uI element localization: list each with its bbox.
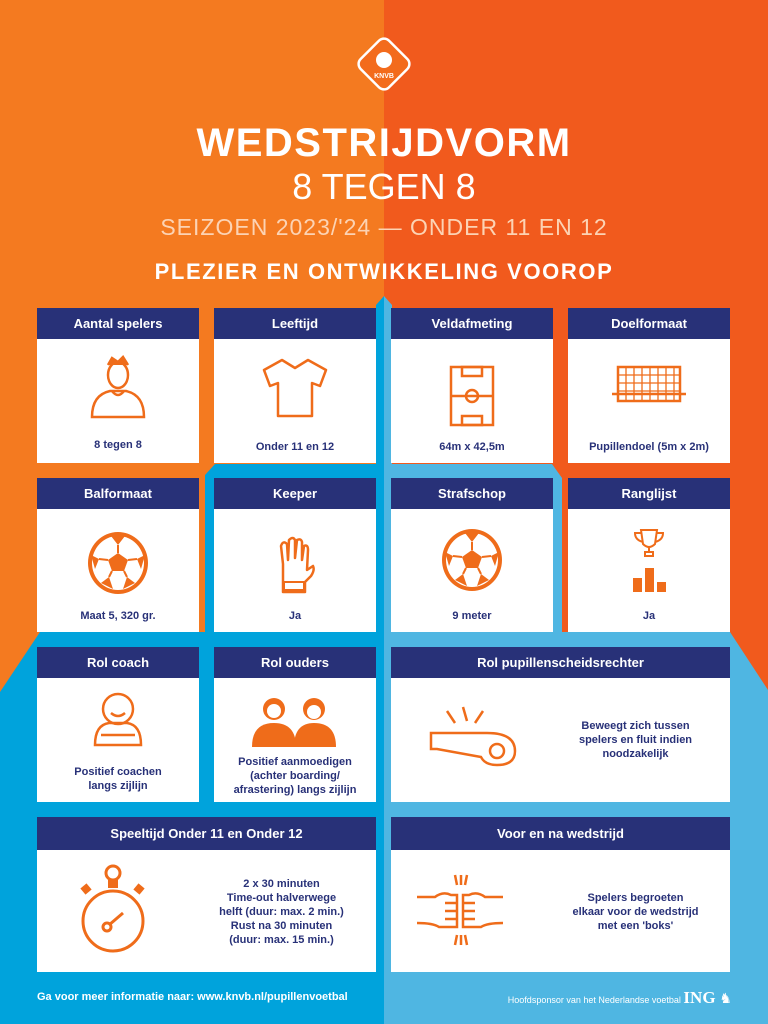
card: Strafschop <box>391 478 553 632</box>
logo <box>357 37 411 91</box>
card: Aantal spelers <box>37 308 199 463</box>
card: Leeftijd: Onder 11 en 12 <box>256 441 334 453</box>
icon: field <box>450 366 494 426</box>
card: Rol coach <box>37 647 199 802</box>
card: Speeltijd: Speeltijd Onder 11 en Onder 12 <box>110 826 303 841</box>
card: Rol pupillenscheidsrechter: Rol pupillenscheidsrechter <box>477 655 644 670</box>
card: Rol pupillenscheidsrechter <box>391 647 730 802</box>
card: Voor en na wedstrijd: met een 'boks' <box>598 920 673 932</box>
card: Rol ouders: Rol ouders <box>261 655 329 670</box>
title: SEIZOEN 2023/'24 — ONDER 11 EN 12 <box>160 214 608 240</box>
card: Leeftijd <box>214 308 376 463</box>
icon: ball <box>88 532 148 594</box>
card: Rol coach: Rol coach <box>87 655 149 670</box>
card: Rol coach: Positief coachen <box>74 766 162 778</box>
card: Leeftijd: Leeftijd <box>272 316 318 331</box>
card: Rol ouders <box>214 647 376 802</box>
icon: parents <box>252 698 336 747</box>
card: Rol pupillenscheidsrechter: spelers en fluit indien <box>579 734 692 746</box>
card: Voor en na wedstrijd: Spelers begroeten <box>588 892 683 904</box>
card: Strafschop: Strafschop <box>438 486 506 501</box>
icon: shirt <box>262 358 328 418</box>
icon: player <box>90 355 146 418</box>
card: Balformaat: Balformaat <box>84 486 152 501</box>
icon: stopwatch <box>80 864 144 952</box>
footer: website: Ga voor meer informatie naar: www.knvb.nl/pupillenvoetbal <box>37 991 348 1003</box>
subtitle: PLEZIER EN ONTWIKKELING VOOROP <box>155 259 613 284</box>
card: Voor en na wedstrijd <box>391 817 730 972</box>
card: Keeper: Ja <box>289 610 301 622</box>
card: Rol coach: langs zijlijn <box>88 780 148 792</box>
icon: ball <box>442 529 502 591</box>
card: Speeltijd: 2 x 30 minuten <box>243 878 320 890</box>
logo: KNVB <box>374 73 394 80</box>
card: Rol ouders: afrastering) langs zijlijn <box>234 784 356 796</box>
title <box>160 121 608 240</box>
footer: sponsor: Hoofdsponsor van het Nederlandse voetbal ING ♞ <box>508 988 732 1007</box>
icon: glove <box>280 536 315 594</box>
card: Strafschop: 9 meter <box>452 610 492 622</box>
card: Voor en na wedstrijd: elkaar voor de wedstrijd <box>573 906 698 918</box>
card: Veldafmeting: Veldafmeting <box>432 316 512 331</box>
card: Rol pupillenscheidsrechter: noodzakelijk <box>602 748 669 760</box>
card: Speeltijd: Time-out halverwege <box>227 892 336 904</box>
card: Keeper: Keeper <box>273 486 317 501</box>
card: Speeltijd: helft (duur: max. 2 min.) <box>219 906 344 918</box>
card: Speeltijd <box>37 817 376 972</box>
card: Doelformaat <box>568 308 730 463</box>
card: Ranglijst: Ja <box>643 610 655 622</box>
card: Keeper <box>214 478 376 632</box>
title: WEDSTRIJDVORM <box>196 121 572 165</box>
card: Balformaat <box>37 478 199 632</box>
card: Veldafmeting: 64m x 42,5m <box>439 441 505 453</box>
icon: whistle <box>430 706 516 766</box>
card: Doelformaat: Doelformaat <box>611 316 687 331</box>
card: Balformaat: Maat 5, 320 gr. <box>80 610 156 622</box>
card: Ranglijst: Ranglijst <box>622 486 676 501</box>
card: Voor en na wedstrijd: Voor en na wedstrijd <box>497 826 624 841</box>
title: 8 TEGEN 8 <box>292 166 476 207</box>
card: Speeltijd: Rust na 30 minuten <box>231 920 332 932</box>
card: Aantal spelers: Aantal spelers <box>74 316 162 331</box>
card: Ranglijst <box>568 478 730 632</box>
card: Veldafmeting <box>391 308 553 463</box>
card: Rol ouders: Positief aanmoedigen <box>238 756 352 768</box>
card: Rol pupillenscheidsrechter: Beweegt zich tussen <box>581 720 690 732</box>
icon: fist bump <box>417 874 503 946</box>
card: Doelformaat: Pupillendoel (5m x 2m) <box>589 441 709 453</box>
icon: trophy and podium <box>633 529 666 592</box>
card: Rol ouders: (achter boarding/ <box>250 770 340 782</box>
card: Speeltijd: (duur: max. 15 min.) <box>229 934 334 946</box>
card: Aantal spelers: 8 tegen 8 <box>94 439 142 451</box>
icon: coach <box>94 692 142 746</box>
icon: goal <box>612 366 686 402</box>
